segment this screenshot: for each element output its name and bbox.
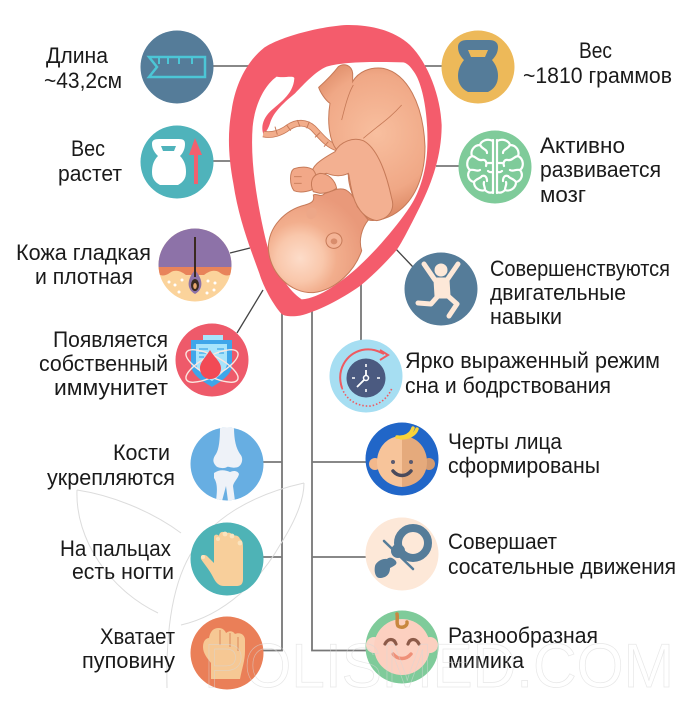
text: immunity: собственный: [39, 351, 168, 376]
second leg: [311, 139, 393, 221]
connector lines: [213, 66, 459, 650]
text: sleep cycle: сна и бодрствования: [405, 373, 611, 398]
uterus with fetus: [229, 25, 442, 316]
text: mimicry: [448, 623, 598, 673]
text: motor skills: [490, 256, 670, 329]
uterus wall: [229, 25, 442, 316]
icon: bone joint: [190, 427, 264, 501]
icon: baby face: [366, 422, 438, 496]
text: length: [44, 43, 122, 93]
text: weight grows: Вес: [71, 136, 105, 161]
icon: kettlebell: [442, 30, 514, 104]
watermark leaves: [77, 483, 304, 688]
text: skin: и плотная: [35, 264, 133, 289]
icon: clock: [330, 340, 402, 412]
watermark text: POLISMED.COM: [204, 632, 674, 701]
icon: immunity shield: [176, 324, 248, 396]
fetus body: [319, 65, 425, 220]
text: facial features: [448, 429, 600, 478]
text: immunity: иммунитет: [54, 375, 168, 400]
text: brain: Активно: [540, 133, 625, 158]
text: immunity: [39, 327, 168, 400]
text: weight: ~1810 граммов: [523, 63, 672, 88]
hands: [290, 167, 337, 193]
text: immunity: Появляется: [53, 327, 168, 352]
icon: fist: [190, 616, 264, 690]
text: bones: Кости: [113, 440, 170, 465]
text: mimicry: мимика: [448, 648, 525, 673]
text: motor skills: навыки: [490, 304, 562, 329]
icon: hand: [190, 522, 264, 596]
text: mimicry: Разнообразная: [448, 623, 598, 648]
text: length: Длина: [46, 43, 109, 68]
text: grabs cord: пуповину: [82, 648, 175, 673]
text: sleep cycle: Ярко выраженный режим: [405, 348, 660, 373]
fetus ear and eye: [305, 206, 344, 251]
crease lines: [294, 85, 402, 183]
text: motor skills: Совершенствуются: [490, 256, 670, 281]
icon: smiling baby: [366, 610, 438, 684]
text: bones: [47, 440, 175, 490]
fetus head: [268, 189, 368, 293]
text: sucking: Совершает: [448, 529, 557, 554]
icon: kettlebell with up arrow: [140, 126, 214, 198]
icon: skin: [158, 228, 232, 302]
text: bones: укрепляются: [47, 465, 175, 490]
icon: brain: [458, 130, 532, 204]
text: weight: Вес: [579, 38, 612, 63]
text: facial features: сформированы: [448, 453, 600, 478]
text: weight grows: растет: [58, 161, 122, 186]
text: brain: [540, 133, 661, 207]
text: brain: развивается: [540, 157, 661, 182]
text: skin: Кожа гладкая: [16, 240, 151, 265]
icon: pacifier: [366, 518, 438, 590]
text: motor skills: двигательные: [490, 280, 626, 305]
text: sucking: [448, 529, 676, 579]
text: weight grows: [58, 136, 122, 186]
text: nails: [60, 536, 174, 584]
text: brain: мозг: [540, 182, 586, 207]
text: grabs cord: [82, 624, 175, 673]
text: sucking: сосательные движения: [448, 554, 676, 579]
text: grabs cord: Хватает: [100, 624, 175, 649]
text: nails: есть ногти: [72, 559, 174, 584]
umbilical cord: [263, 120, 338, 148]
text: facial features: Черты лица: [448, 429, 563, 454]
text: nails: На пальцах: [60, 536, 171, 561]
icon: jumping figure: [404, 252, 478, 326]
text: length: ~43,2см: [44, 68, 122, 93]
icon: ruler: [140, 30, 214, 104]
text: skin: [16, 240, 151, 289]
text: weight: [523, 38, 672, 88]
text: sleep cycle: [405, 348, 660, 398]
